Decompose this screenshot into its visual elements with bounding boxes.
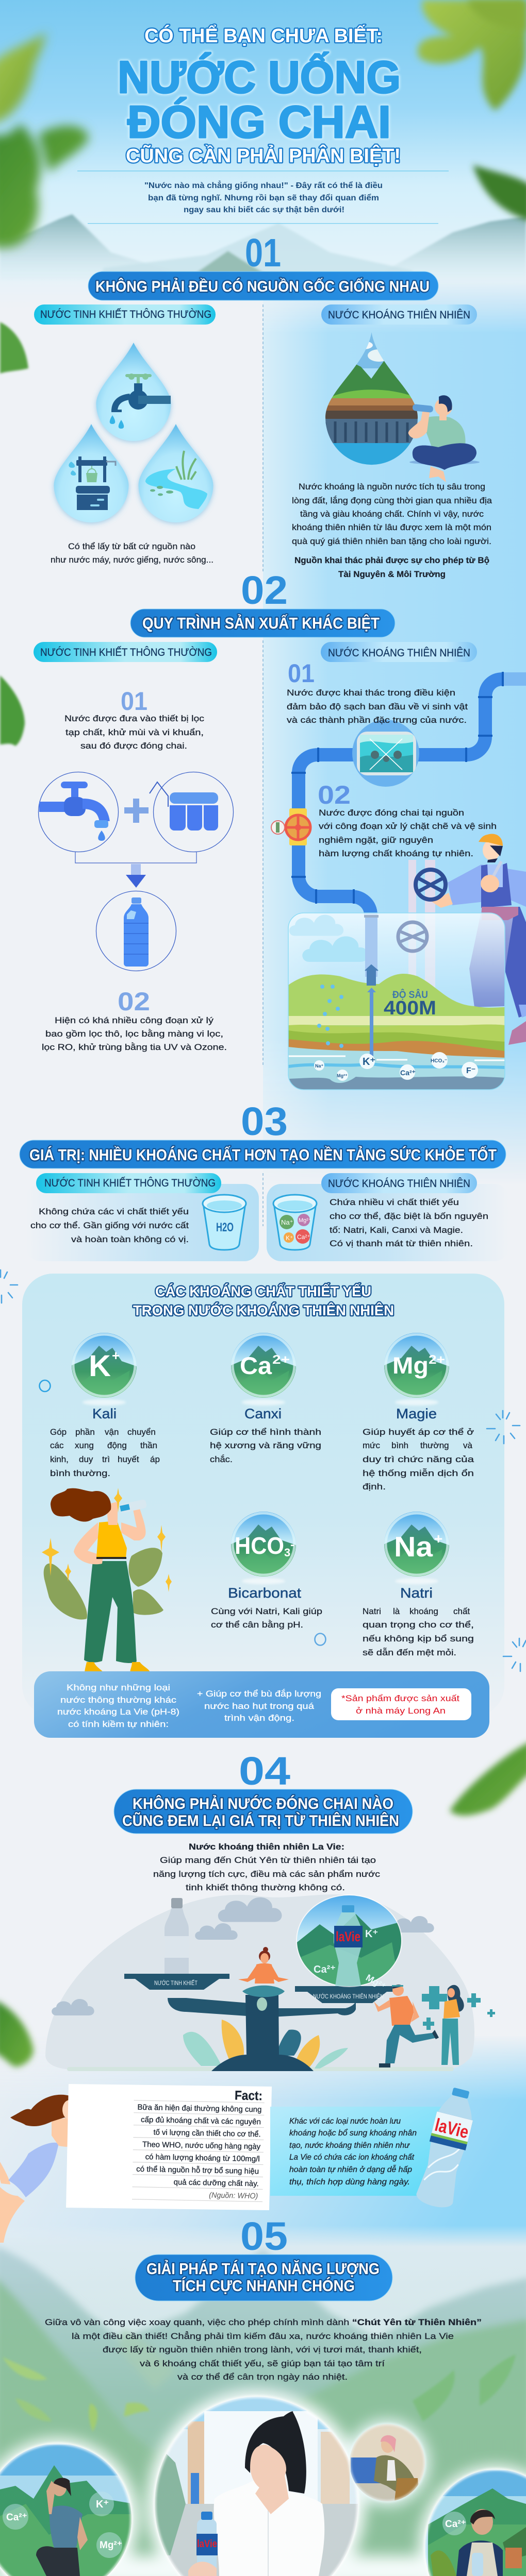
mineral: Bicarbonat: 3 xyxy=(284,1546,290,1559)
right step 02: Nước được đóng chai tại nguồn xyxy=(319,808,464,818)
mineral: Magie: định. xyxy=(363,1482,386,1492)
card: fact: Fact: xyxy=(235,2088,262,2103)
mineral: Magie xyxy=(363,1333,474,1492)
bubble: yoga woman: K⁺ xyxy=(96,2499,109,2510)
bubble: center photo xyxy=(150,2396,366,2576)
mineral: Canxi: Ca xyxy=(240,1352,272,1379)
mineral: Magie: bình xyxy=(391,1440,408,1450)
card: fact xyxy=(66,2084,272,2210)
leaves top xyxy=(0,0,526,247)
leaf left 04 xyxy=(0,2000,34,2067)
leaf mid left xyxy=(0,322,28,374)
text 05: được lấy từ nguồn thiên nhiên trong lành, với vị tươi mát, thanh khiết, xyxy=(103,2345,422,2354)
mineral: Kali: duy xyxy=(79,1454,93,1464)
card: fact: có thể là nguồn hỗ trợ bổ sung hiệu xyxy=(136,2165,259,2176)
left label 02 xyxy=(34,642,217,662)
card: right value: K⁺ xyxy=(286,1234,293,1242)
top mountains xyxy=(0,214,526,281)
mineral: Kali: chuyển xyxy=(127,1427,156,1437)
right step 01: 01 xyxy=(288,659,315,688)
right text 01: lòng đất, lắng đọng cùng thời gian qua nhiều địa xyxy=(292,496,492,505)
bottom mountains background xyxy=(0,2226,526,2576)
mineral: Magie: Mg xyxy=(392,1352,429,1379)
left text 01 xyxy=(51,541,213,565)
left label 01 xyxy=(34,304,216,325)
text 04: tinh khiết thông thường không có. xyxy=(186,1883,345,1892)
right step 02: hàm lượng chất khoáng tự nhiên. xyxy=(319,849,473,858)
fact illustration: woman with glass xyxy=(0,2095,127,2243)
mineral: Natri: là xyxy=(393,1606,400,1616)
left label 01: NƯỚC TINH KHIẾT THÔNG THƯỜNG xyxy=(40,309,211,320)
orb with La Vie bottle: K⁺ xyxy=(365,1928,378,1940)
intro quote xyxy=(77,171,449,224)
intro quote: bạn đã từng nghĩ. Nhưng rồi bạn sẽ thay đổi quan điểm xyxy=(148,193,379,202)
left bottle xyxy=(165,1898,189,1974)
card: right value xyxy=(267,1173,509,1261)
left step 01: tạp chất, khử mùi và vi khuẩn, xyxy=(65,727,204,737)
orb with La Vie bottle: Ca²⁺ xyxy=(314,1964,336,1975)
title: NƯỚC UỐNG xyxy=(118,52,401,103)
mineral: Natri: khoáng xyxy=(409,1606,438,1616)
glow bottom xyxy=(0,2389,526,2576)
mineral: Kali: xung xyxy=(75,1440,94,1450)
illustration: balance: NƯỚC TINH KHIẾT xyxy=(154,1979,198,1987)
text 05: và cơ thể để cân trọn ngày náo nhiệt. xyxy=(177,2372,348,2382)
card: cyan italic text: Khác với các loại nước hoàn lưu xyxy=(289,2117,401,2126)
mineral: Magie: 2+ xyxy=(429,1353,445,1367)
card: cyan italic text: hoàn toàn tự nhiên ở dạng dễ hấp xyxy=(289,2165,412,2174)
text 04: Nước khoáng thiên nhiên La Vie: xyxy=(189,1842,344,1852)
mineral: Natri: chất xyxy=(453,1606,470,1616)
heading 01 xyxy=(88,272,438,300)
right step 02: 02 xyxy=(318,781,351,809)
bubble: center photo: laVie xyxy=(197,2538,217,2550)
callout: blue alkaline box: nước thông thường khác xyxy=(60,1695,177,1705)
section 01 number: 01 xyxy=(245,231,281,275)
text 04: năng lượng tích cực, điều mà các sản phẩm nước xyxy=(153,1869,381,1879)
panel: depth diagram: F⁻ xyxy=(466,1066,475,1075)
intro quote: "Nước nào mà chẳng giống nhau!" - Đây rất có thể là điều xyxy=(144,180,383,190)
card: left value xyxy=(26,1173,259,1261)
text 05: Giữa vô vàn công việc xoay quanh, việc cho phép chính mình dành “Chút Yên từ Thiên Nhiên” xyxy=(45,2317,482,2327)
title: ĐÓNG CHAI xyxy=(127,96,391,147)
card: right value: tố: Natri, Kali, Canxi và Magie. xyxy=(330,1225,463,1235)
right text 01: Nguồn khai thác phải được sự cho phép từ Bộ xyxy=(294,555,489,565)
right text 01: khoáng thiên nhiên từ lâu được xem là một món xyxy=(292,522,491,532)
heading 05: GIẢI PHÁP TÁI TẠO NĂNG LƯỢNG xyxy=(146,2260,380,2278)
sparkles section 3 xyxy=(0,1270,526,1671)
left step 02: Hiện có khá nhiều công đoạn xử lý xyxy=(55,1015,214,1025)
mineral: Canxi: Giúp cơ thể hình thành xyxy=(210,1427,321,1437)
panel: depth diagram: Na⁺ xyxy=(315,1063,324,1069)
image: mineral water drop xyxy=(322,332,420,466)
mineral: Kali: thần xyxy=(140,1440,157,1450)
panel: depth diagram: HCO₃⁻ xyxy=(431,1058,447,1064)
title: ĐÓNG CHAI xyxy=(127,96,391,147)
card: right value: Chứa nhiều vi chất thiết yếu xyxy=(330,1197,459,1207)
card: cyan italic text xyxy=(270,2107,446,2196)
mineral: Magie: và xyxy=(463,1440,472,1450)
mineral: Natri: Natri xyxy=(400,1585,433,1601)
mineral: Kali: Góp xyxy=(50,1427,67,1437)
mineral: Magie: mức xyxy=(363,1440,381,1450)
card: fact: có hàm lượng khoáng từ 100mg/l xyxy=(145,2153,260,2163)
heading 02 xyxy=(130,609,395,637)
arrow: to bottle xyxy=(75,852,196,888)
card: fact: tố vi lượng cần thiết cho cơ thể. xyxy=(153,2128,261,2139)
card: right value: Na⁺ xyxy=(281,1218,293,1226)
left step 02 xyxy=(42,987,227,1052)
mineral: Kali: K xyxy=(89,1349,111,1383)
mineral: Natri: nếu không kịp bổ sung xyxy=(363,1634,474,1643)
callout: blue alkaline box: Không như những loại xyxy=(67,1683,170,1692)
mineral: Kali: kinh, xyxy=(50,1454,69,1464)
right step 01 xyxy=(287,659,468,725)
card: right value: NƯỚC KHOÁNG THIÊN NHIÊN xyxy=(328,1178,470,1190)
card: right value: Có vị thanh mát từ thiên nhiên. xyxy=(330,1239,473,1248)
heading 04: KHÔNG PHẢI NƯỚC ĐÓNG CHAI NÀO xyxy=(133,1795,393,1812)
mineral: Bicarbonat: cơ thể cân bằng pH. xyxy=(211,1620,303,1630)
callout: blue alkaline box xyxy=(34,1671,489,1738)
icon: bottle circle xyxy=(96,891,176,971)
mineral: Natri: Natri xyxy=(363,1606,381,1616)
heading 04: CŨNG ĐEM LẠI GIÁ TRỊ TỪ THIÊN NHIÊN xyxy=(122,1812,399,1829)
divider xyxy=(262,304,264,1226)
minerals title xyxy=(133,1283,394,1318)
woman with plus xyxy=(422,1985,495,2065)
mineral: Bicarbonat: Bicarbonat xyxy=(228,1585,302,1601)
mineral: Kali: các xyxy=(50,1440,64,1450)
runner xyxy=(374,1985,439,2067)
mineral: Bicarbonat: Cùng với Natri, Kali giúp xyxy=(211,1606,322,1616)
right text 01 xyxy=(292,482,492,579)
mineral: Kali: áp xyxy=(150,1454,160,1464)
orb with La Vie bottle xyxy=(294,1893,405,1992)
left step 01: 01 xyxy=(121,687,147,716)
icon: filter circle xyxy=(150,772,233,852)
mineral: Magie: duy trì chức năng của xyxy=(363,1454,474,1464)
right label 02 xyxy=(321,642,477,662)
mineral: Kali: + xyxy=(112,1348,120,1363)
mineral: Natri xyxy=(363,1512,474,1657)
mineral: Kali: huyết xyxy=(118,1454,139,1464)
heading 03 xyxy=(20,1140,506,1168)
panel: depth diagram xyxy=(288,913,505,1090)
card: fact: Bữa ăn hiện đại thường không cung xyxy=(137,2103,262,2114)
right step 02 xyxy=(318,781,497,858)
mineral: Canxi: hệ xương và răng vững xyxy=(210,1440,321,1450)
right step 01: đảm bảo độ sạch ban đầu về vi sinh vật xyxy=(287,702,468,711)
bubble: gardener man xyxy=(423,2468,526,2576)
icon: man drinking xyxy=(408,395,480,482)
left step 02: 02 xyxy=(118,987,150,1016)
right label 01: NƯỚC KHOÁNG THIÊN NHIÊN xyxy=(328,309,470,321)
title xyxy=(118,24,401,167)
mineral: Canxi: 2+ xyxy=(272,1353,290,1367)
text 04: Giúp mang đến Chút Yên từ thiên nhiên tái tạo xyxy=(160,1855,376,1865)
image: La Vie bottle xyxy=(415,2085,480,2211)
leaf left 02 xyxy=(0,675,25,746)
mineral: Canxi xyxy=(210,1333,321,1464)
panel: depth diagram: ĐỘ SÂU xyxy=(392,989,428,1001)
panel: depth diagram: Mg²⁺ xyxy=(337,1073,348,1078)
heading 05 xyxy=(135,2255,392,2301)
meditating person xyxy=(238,1947,289,1997)
text 05: và 6 khoáng chất thiết yếu, sẽ giúp bạn tái tạo tâm trí xyxy=(140,2359,385,2368)
right step 02: với công đoạn xử lý chặt chẽ và vệ sinh xyxy=(319,821,497,831)
illustration: balance: NƯỚC KHOÁNG THIÊN NHIÊN xyxy=(313,1992,384,2000)
minerals title: TRONG NƯỚC KHOÁNG THIÊN NHIÊN xyxy=(133,1302,394,1318)
icon: well drop xyxy=(54,424,129,522)
callout: blue alkaline box: nước hao hụt trong quá xyxy=(204,1701,315,1711)
heading 04 xyxy=(114,1789,413,1834)
mineral: Magie: hệ thống miễn dịch ổn xyxy=(363,1468,474,1478)
icon: plus xyxy=(124,799,149,823)
bubble: yoga woman: Mg²⁺ xyxy=(100,2540,122,2551)
callout: blue alkaline box: *Sản phẩm được sản xuất xyxy=(341,1693,459,1703)
right label 02: NƯỚC KHOÁNG THIÊN NHIÊN xyxy=(328,647,470,659)
callout: blue alkaline box: ở nhà máy Long An xyxy=(356,1706,446,1716)
card: cyan italic text: khoáng hoặc bổ sung khoáng nhân xyxy=(289,2129,417,2138)
icon: river drop xyxy=(138,424,213,522)
title: CÓ THỂ BẠN CHƯA BIẾT: xyxy=(144,24,383,47)
intro quote: ngay sau khi biết các sự thật bên dưới! xyxy=(184,206,344,214)
card: cyan italic text: tạo, nước khoáng thiên nhiên như xyxy=(289,2141,410,2150)
mineral: Bicarbonat: - xyxy=(290,1538,294,1552)
icon: water window xyxy=(352,720,419,787)
mineral: Canxi: chắc. xyxy=(210,1454,233,1464)
panel: depth diagram: K⁺ xyxy=(363,1056,375,1067)
bubble: small photo xyxy=(348,2421,428,2504)
section 03 number: 03 xyxy=(241,1099,288,1144)
title: NƯỚC UỐNG xyxy=(118,52,401,103)
callout: blue alkaline box: nước khoáng La Vie (pH-8) xyxy=(57,1707,179,1717)
heading 05: TÍCH CỰC NHANH CHÓNG xyxy=(173,2276,355,2295)
mineral: Canxi: Canxi xyxy=(244,1406,282,1421)
right label 01 xyxy=(321,304,477,325)
mineral: Kali: bình thường. xyxy=(50,1468,110,1478)
mineral: Bicarbonat xyxy=(211,1512,322,1630)
card: cyan italic text: thụ, thích hợp dùng hàng ngày. xyxy=(289,2178,410,2187)
icon: tap drop xyxy=(96,343,171,441)
bubble: yoga woman xyxy=(0,2442,134,2576)
mineral: Natri: + xyxy=(434,1531,442,1547)
right step 02: nghiêm ngặt, giữ nguyên xyxy=(319,835,433,845)
bubble: yoga woman: Ca²⁺ xyxy=(6,2512,27,2523)
illustration: balance xyxy=(45,1893,495,2071)
mineral: Kali: phần xyxy=(75,1427,95,1437)
right step 01: Nước được khai thác trong điều kiện xyxy=(287,688,455,698)
card: left value: NƯỚC TINH KHIẾT THÔNG THƯỜNG xyxy=(44,1177,216,1189)
card: fact: cấp đủ khoáng chất và các nguyên xyxy=(141,2115,261,2126)
right text 01: quà quý giá thiên nhiên ban tặng cho loài người. xyxy=(292,536,491,546)
mineral: Natri: quan trọng cho cơ thể, xyxy=(363,1620,474,1630)
panel: depth diagram: Ca²⁺ xyxy=(400,1069,416,1077)
card: left value: cho cơ thể. Gần giống với nước cất xyxy=(30,1221,189,1230)
orb with La Vie bottle: Mg²⁺ xyxy=(364,1972,388,1992)
worker xyxy=(408,834,526,1045)
left step 01: Nước được đưa vào thiết bị lọc xyxy=(64,714,205,723)
section 02 number: 02 xyxy=(241,568,288,613)
right text 01: Tài Nguyên & Môi Trường xyxy=(338,569,446,579)
mineral: Bicarbonat: HCO xyxy=(235,1532,284,1559)
right step 01: và các thành phần đặc trưng của nước. xyxy=(287,715,467,725)
mineral: Kali: trì xyxy=(102,1454,110,1464)
callout: blue alkaline box: + Giúp cơ thể bù đắp lượng xyxy=(197,1689,321,1699)
fact illustration: woman with glass: H₂O xyxy=(97,2151,116,2176)
leaves base xyxy=(183,2020,348,2069)
pipe xyxy=(291,672,526,915)
image: La Vie bottle: laVie xyxy=(433,2115,471,2143)
mineral: Natri: sẽ dẫn đến mệt mỏi. xyxy=(363,1648,456,1657)
left label 02: NƯỚC TINH KHIẾT THÔNG THƯỜNG xyxy=(40,647,212,658)
title: CŨNG CẦN PHẢI PHÂN BIỆT! xyxy=(126,144,401,167)
card: left value: H2O xyxy=(216,1221,234,1234)
section 04 number: 04 xyxy=(239,1749,290,1793)
mineral: Natri: Na xyxy=(394,1531,433,1563)
minerals title: CÁC KHOÁNG CHẤT THIẾT YẾU xyxy=(155,1283,371,1299)
right text 01: tầng và giàu khoáng chất. Chính vì vậy, nước xyxy=(300,509,484,519)
mineral: Kali xyxy=(50,1333,160,1478)
text 04 xyxy=(153,1842,381,1892)
right text 01: Nước khoáng là nguồn nước tích tụ sâu trong xyxy=(299,482,485,492)
left step 02: bao gồm lọc thô, lọc bằng màng vi lọc, xyxy=(45,1029,223,1039)
scale xyxy=(124,1974,399,2071)
section 05 number: 05 xyxy=(240,2214,288,2259)
text 05: là một điều cần thiết! Chẳng phải tìm kiếm đâu xa, nước khoáng thiên nhiên La Vie xyxy=(72,2331,454,2341)
panel: essential minerals xyxy=(22,1274,504,1717)
mineral: Magie: Giúp huyết áp cơ thể ở xyxy=(363,1427,474,1437)
card: right value: Mg²⁺ xyxy=(299,1217,311,1224)
left step 01: sau đó được đóng chai. xyxy=(80,741,187,751)
left step 01 xyxy=(64,687,205,751)
mineral: Kali: vận xyxy=(105,1427,119,1437)
card: right value: cho cơ thể, đặc biệt là bốn nguyên xyxy=(330,1211,488,1221)
card: fact: (Nguồn: WHO) xyxy=(209,2191,258,2200)
left text 01: Có thể lấy từ bất cứ nguồn nào xyxy=(68,541,195,551)
card: fact: Theo WHO, nước uống hàng ngày xyxy=(142,2140,261,2151)
mineral: Kali: Kali xyxy=(92,1406,117,1421)
heading 01: KHÔNG PHẢI ĐỀU CÓ NGUỒN GỐC GIỐNG NHAU xyxy=(95,278,430,295)
bubble: gardener man: Ca²⁺ xyxy=(445,2519,466,2530)
left step 02: lọc RO, khử trùng bằng tia UV và Ozone. xyxy=(42,1042,227,1052)
card: fact: quả các dưỡng chất này. xyxy=(174,2178,259,2188)
leaf right 04 xyxy=(450,1741,526,1816)
callout: blue alkaline box: trình vận động. xyxy=(224,1713,294,1723)
orb with La Vie bottle: laVie xyxy=(336,1929,360,1944)
card: left value: Không chứa các vi chất thiết yếu xyxy=(39,1207,189,1216)
mineral: Kali: động xyxy=(107,1440,127,1450)
icon: tap circle xyxy=(38,772,119,852)
callout: blue alkaline box: có tính kiềm tự nhiên: xyxy=(68,1719,169,1729)
left text 01: như nước máy, nước giếng, nước sông... xyxy=(51,555,213,565)
mineral: Magie: thường xyxy=(420,1440,449,1450)
card: left value: và hoàn toàn không có vị. xyxy=(71,1234,189,1244)
icon: valve xyxy=(271,808,310,845)
illustration: woman drinking xyxy=(42,1488,172,1674)
mineral: Magie: Magie xyxy=(396,1406,437,1421)
card: cyan italic text: La Vie có chứa các ion khoáng chất xyxy=(289,2153,415,2162)
card: right value: Ca²⁺ xyxy=(297,1233,310,1241)
text 05 xyxy=(45,2317,482,2382)
heading 02: QUY TRÌNH SẢN XUẤT KHÁC BIỆT xyxy=(142,614,380,632)
panel: depth diagram: 400M xyxy=(384,997,436,1019)
